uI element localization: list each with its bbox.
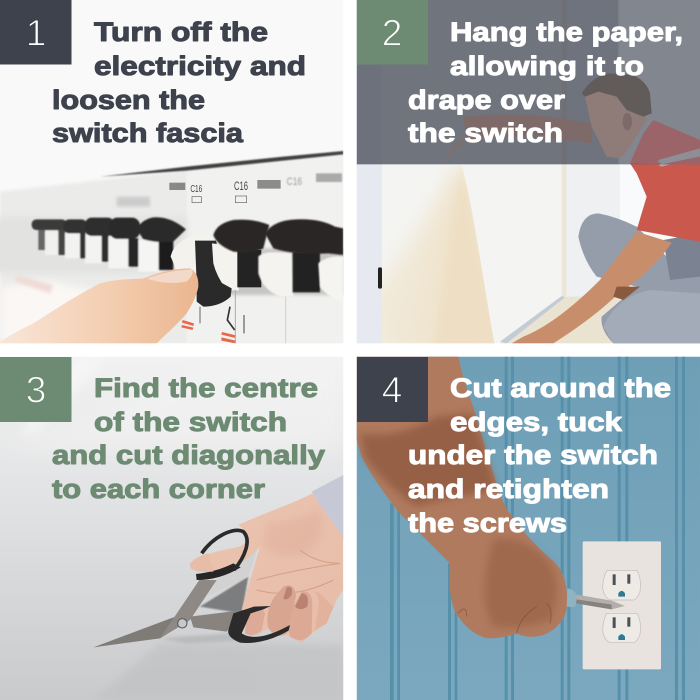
- photo: arm tightening outlet screws: [357, 357, 700, 700]
- man body: [512, 148, 700, 343]
- outlet plate: [583, 541, 661, 669]
- thumb tip over scissors ring: [190, 553, 213, 572]
- dark overlay band: [357, 0, 700, 164]
- heading: step 1: loosen the: [52, 85, 205, 115]
- heading: step 1: switch fascia: [52, 118, 243, 148]
- heading: step 3: Find the centre: [94, 373, 318, 403]
- photo: circuit breaker panel: C16: [190, 184, 203, 195]
- red marks: [181, 320, 236, 343]
- near switches: [237, 250, 261, 287]
- photo: circuit breaker panel: [0, 150, 344, 344]
- fingernail: [147, 269, 193, 283]
- scissors: [93, 530, 290, 647]
- man upper body seen through band: [443, 73, 700, 164]
- heading: step 1: [52, 17, 306, 148]
- fingers: [245, 585, 333, 640]
- shirt cuff: [312, 475, 343, 540]
- screwdriver: [567, 588, 625, 609]
- number box 3: 3: [26, 370, 46, 410]
- heading: step 1: electricity and: [94, 51, 306, 81]
- heading: step 1: Turn off the: [94, 17, 268, 47]
- photo: circuit breaker panel: C16: [287, 176, 302, 188]
- heading: step 3: and cut diagonally: [52, 440, 325, 470]
- finger: [0, 268, 198, 343]
- heading: step 4: the screws: [408, 508, 567, 538]
- heading: step 2: the switch: [408, 118, 563, 148]
- heading: step 4: and retighten: [408, 474, 609, 504]
- heading: step 3: to each corner: [52, 474, 265, 504]
- wallpaper drape: [382, 165, 494, 344]
- heading: step 3: [52, 373, 325, 504]
- central pressed switch: [170, 238, 188, 270]
- heading: step 2: Hang the paper,: [450, 17, 683, 47]
- panel: step 4 cut around the edges: [357, 357, 700, 700]
- heading: step 2: allowing it to: [450, 51, 644, 81]
- photo: circuit breaker panel: C16: [234, 179, 248, 193]
- panel: step 1 turn off the electricity: [0, 0, 347, 343]
- heading: step 3: of the switch: [94, 407, 287, 437]
- wall grooves: [390, 357, 685, 700]
- hand: [190, 493, 343, 643]
- arm: [357, 357, 567, 638]
- number box 4: 4: [382, 370, 402, 410]
- heading: step 4: under the switch: [408, 440, 658, 470]
- photo: hand with scissors: [0, 357, 343, 700]
- number box 2: 2: [382, 12, 402, 54]
- heading: step 2: drape over: [408, 85, 565, 115]
- panel: step 3 cut diagonally: [0, 357, 343, 700]
- number box 4: [357, 357, 428, 422]
- photo: man hanging wallpaper: [357, 0, 700, 350]
- panel: step 2 hang the paper: [357, 0, 700, 350]
- number box 1: 1: [26, 12, 46, 54]
- heading: step 4: Cut around the: [450, 373, 671, 403]
- heading: step 4: edges, tuck: [450, 407, 622, 437]
- heading: step 2: [408, 17, 683, 148]
- number box 2: [357, 0, 428, 64]
- number box 1: [0, 0, 72, 64]
- number box 3: [0, 357, 72, 422]
- far breaker switches: [32, 217, 186, 272]
- heading: step 4: [408, 373, 671, 538]
